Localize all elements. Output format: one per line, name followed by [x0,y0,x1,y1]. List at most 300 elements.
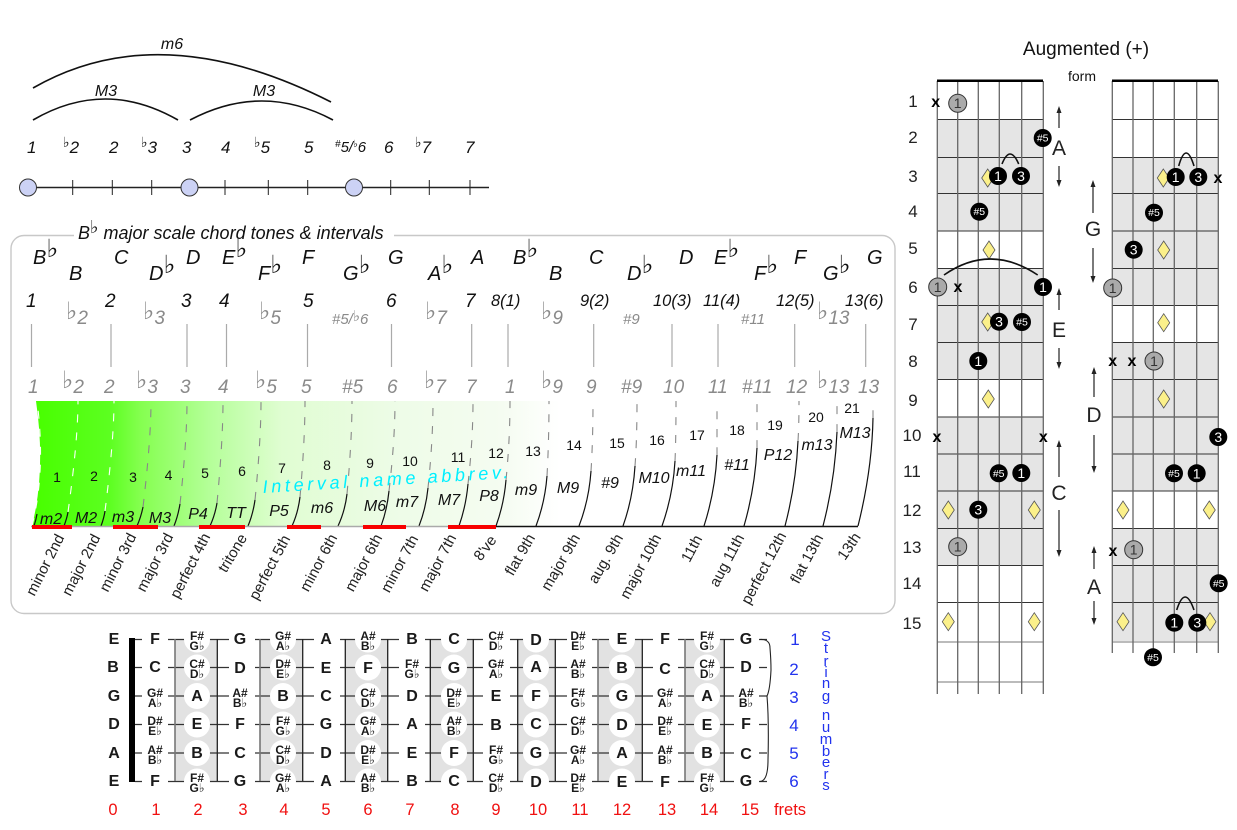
note names row: D [149,263,163,285]
extended interval degrees row: 13 [858,377,880,398]
fretboard note names: C [234,745,246,762]
fretboard note names: A [191,688,203,705]
scale degree labels: ♭ [63,134,70,150]
gray root dots [1104,279,1163,559]
note names row: A [470,247,484,269]
semitone counts: 21 [844,400,860,416]
semitone counts: 9 [366,455,374,471]
rotated interval names: major 6th [342,531,386,595]
black chord tone dots: #5 [1016,316,1028,328]
extended interval degrees row: 6 [387,377,398,398]
guitar fretboard note chart [100,626,832,819]
black chord tone dots [1125,168,1228,666]
scale degree labels: # [335,139,341,150]
fretboard note names: G♭ [488,753,504,767]
fretboard note names: F# [571,686,585,700]
natural scale degrees row: 9(2) [580,292,609,310]
scale degree labels: 1 [27,138,36,157]
altered scale degrees row: 3 [154,308,165,329]
interval abbreviations: M7 [438,492,461,509]
vertical caption: String numbers: t [824,640,829,657]
fret numbers: 15 [741,801,759,819]
extended interval degrees row: 7 [435,377,447,398]
interval number line diagram [20,36,489,196]
fretboard note names: G# [657,686,673,700]
semitone counts: 7 [278,460,286,476]
fretboard note names: A# [232,686,248,700]
altered scale degrees row: #5/ [332,311,353,328]
fretboard note names: A# [360,771,376,785]
extended interval degrees row: 4 [218,377,229,398]
fretboard note names: G [616,688,628,705]
fretboard note names: E [109,631,120,648]
natural scale degrees row: 1 [26,291,37,312]
fretboard note names: D [406,688,418,705]
fretboard note names: E [491,688,502,705]
fretboard note names: F# [700,629,714,643]
fret position numbers [903,92,921,633]
rotated interval names: tritone [215,531,251,576]
altered scale degrees row: ♭ [66,298,77,325]
semitone counts: 13 [525,443,541,459]
note names row: D [679,247,693,269]
form A lower: A [1087,576,1101,599]
natural scale degrees row: 2 [104,291,116,312]
natural scale degrees row: 11(4) [703,292,740,310]
note names row: B [513,247,526,269]
fretboard note names: G♭ [190,781,204,795]
fretboard note names: A [530,659,542,676]
fretboard note names: B♭ [571,667,585,681]
fretboard note names: D♭ [700,667,714,681]
semitone counts: 14 [566,437,582,453]
note names row: ♭ [359,251,370,279]
neck strings [937,81,1043,694]
extended interval degrees row: 3 [180,377,191,398]
semitone counts: 3 [129,469,137,485]
muted string marks: x [1109,543,1118,560]
arc: m6: m6 [161,36,183,53]
note names row: E [714,247,727,269]
fretboard note names: F [741,716,751,733]
rotated interval names [23,529,865,607]
rotated interval names: major 3rd [133,530,177,595]
extended interval degrees row: 5 [266,377,277,398]
fret position numbers: 5 [908,239,918,258]
note names row: C [114,247,129,269]
natural scale degrees row: 8(1) [491,292,520,310]
rotated interval names: 13th [834,530,865,563]
form D [1086,367,1102,473]
note names row: B [549,263,562,285]
altered scale degrees row: #9 [623,311,640,328]
fretboard note names: E [617,774,628,791]
interval abbreviations: M2 [75,510,97,527]
fretboard note names: D♭ [571,724,585,738]
form E: E [1052,319,1066,342]
even fret shading [175,639,724,781]
rotated interval names: 8've [471,532,500,564]
extended interval degrees row: #9 [621,377,643,398]
interval abbreviations: P8 [479,488,499,505]
form A upper: A [1052,137,1066,160]
fretboard note names: A♭ [489,667,503,681]
altered scale degrees row: 13 [828,308,850,329]
fret numbers: 2 [193,801,203,819]
form G: G [1085,218,1101,241]
note names row: ♭ [526,235,538,263]
fretboard note names: G [530,745,542,762]
fretboard note names: B♭ [658,753,672,767]
fret position numbers: 10 [903,426,921,445]
note names row: G [388,247,404,269]
semitone counts: 4 [165,467,173,483]
fret position numbers: 12 [903,501,921,520]
fretboard note names: C# [275,743,291,757]
string numbers: 3 [789,688,799,707]
fretboard note names: C [448,773,460,790]
fretboard note names: D# [446,686,462,700]
fretboard note names: A [701,688,713,705]
fretboard note names: B♭ [739,696,753,710]
fret position numbers: 1 [908,92,918,111]
fretboard note names: D [320,745,332,762]
extended interval degrees row: ♭ [136,367,147,394]
fretboard note names: G [234,631,246,648]
fretboard note names: G [320,716,332,733]
scale degree labels: 3 [182,138,192,157]
form A upper [1052,106,1066,187]
vertical caption: String numbers: e [822,754,830,771]
fretboard note names: E [702,717,713,734]
note backgrounds even frets [184,626,720,794]
panel border [11,236,895,614]
altered scale degrees row: 7 [436,308,448,329]
neck frets [1112,120,1218,602]
fretboard note names: C [320,688,332,705]
position arrows left column [1051,106,1067,557]
rotated interval names: major 7th [416,531,460,595]
fretboard note names: D# [657,714,673,728]
fretboard note names: D [740,659,752,676]
fretboard note names: G# [275,629,291,643]
fret position numbers: 15 [903,614,921,633]
form C: C [1051,482,1067,505]
extended interval degrees row: ♭ [541,367,552,394]
fretboard note names: B♭ [447,724,461,738]
natural scale degrees row: 6 [386,291,397,312]
muted string marks: x [954,279,963,296]
fretboard note names: G [108,688,120,705]
note names row: ♭ [641,251,653,279]
extended interval degrees row: #5 [342,377,364,398]
note names row: ♭ [766,251,778,279]
rotated interval names: flat 13th [787,531,827,586]
heading: Augmented: Augmented (+) [1023,39,1149,60]
fretboard note names: F [660,774,670,791]
fretboard note names: A♭ [276,781,290,795]
fretboard note names: A♭ [361,724,375,738]
altered scale degrees row: ♭ [541,298,552,325]
neck nut [1112,80,1218,82]
vertical caption: String numbers: u [822,719,830,736]
fretboard note names: A [108,745,120,762]
vertical caption: String numbers: n [822,675,830,692]
note names row: ♭ [270,251,282,279]
fret numbers: 11 [571,801,589,819]
fretboard note names: B♭ [361,639,375,653]
fretboard note names: E♭ [571,781,585,795]
natural scale degrees row: 12(5) [776,292,815,310]
fretboard note names: F# [190,629,204,643]
fret numbers: 0 [108,801,118,819]
black chord tone dots: #5 [1147,652,1159,664]
note names row: D [186,247,200,269]
yellow diamonds [942,169,1040,631]
fretboard note names: G♭ [276,724,290,738]
fret numbers: 4 [279,801,289,819]
fret position numbers: 6 [908,278,918,297]
muted string marks: x [933,429,942,446]
extended interval degrees row: 11 [708,377,728,398]
fretboard note names: B♭ [361,781,375,795]
fret numbers: 6 [363,801,373,819]
fretboard note names: G [234,773,246,790]
neck nut [937,80,1043,82]
fretboard note names: D♭ [276,753,290,767]
fretboard note names: G [448,660,460,677]
semitone counts: 6 [238,463,246,479]
semitone counts: 2 [90,468,98,484]
fretboard note names: E♭ [571,639,585,653]
fretboard note names: A♭ [276,639,290,653]
altered scale degrees row: 5 [270,308,281,329]
note names row [33,235,883,285]
scale degree labels: 6 [358,139,367,156]
fretboard note names: G# [360,714,376,728]
gray root dots: 1 [1150,353,1158,369]
panel heading: B [78,223,90,243]
fretboard note names: F [531,688,541,705]
scale degree labels: 6 [384,138,394,157]
vertical caption: String numbers: n [822,707,830,724]
lower light fret [1112,641,1218,643]
note names row: G [867,247,883,269]
interval abbreviations: m11 [676,463,706,480]
fretboard note names: F [150,773,160,790]
semitone counts [53,400,860,485]
black chord tone dots: 3 [1193,615,1201,631]
black chord tone dots: 1 [1039,279,1047,295]
gray root dots: 1 [954,538,962,554]
arc: M3 left: M3 [95,83,117,100]
fret numbers: 14 [700,801,718,819]
semitone counts: 15 [609,435,625,451]
white dashed fan lines [32,401,114,526]
chord tone circles [20,179,362,196]
extended interval degrees row: 12 [786,377,808,398]
natural scale degrees row: 5 [303,291,314,312]
scale degree labels: 5 [261,138,271,157]
fretboard note names: B [107,659,119,676]
fret numbers: 3 [238,801,248,819]
extended interval degrees row [28,367,880,398]
interval abbreviations: M13 [839,425,871,442]
fretboard note names: A# [360,629,376,643]
rotated interval names: minor 6th [297,531,341,595]
black chord tone dots: 1 [994,168,1002,184]
extended interval degrees row: ♭ [817,367,828,394]
extended interval degrees row: ♭ [255,367,266,394]
interval abbreviations [40,425,871,528]
vertical caption: String numbers: b [822,743,830,760]
string numbers: 1 [790,630,800,649]
extended interval degrees row: 9 [586,377,597,398]
vertical caption: String numbers: i [824,664,828,681]
note names row: D [627,263,641,285]
rotated interval names: perfect 12th [738,529,790,607]
fret position numbers: 9 [908,391,918,410]
fretboard note names: A# [147,743,163,757]
neck strings [1112,81,1218,653]
extended interval degrees row: 10 [663,377,685,398]
scale degree labels: 7 [422,138,432,157]
note names row: B [69,263,82,285]
semitone counts: 10 [402,453,418,469]
slur arcs [944,154,1038,275]
string numbers: 2 [789,660,799,679]
rotated interval names: 11th [678,532,706,565]
fretboard note names: C [659,661,671,678]
interval abbreviations: TT [226,505,247,522]
form A lower [1087,546,1101,625]
fretboard note names: C [149,659,161,676]
note names row: ♭ [727,235,739,263]
altered scale degrees row: ♭ [425,298,436,325]
rotated interval names: flat 9th [502,531,539,579]
note names row: ♭ [839,251,850,279]
fretboard note names: D [530,774,542,791]
fretboard note names: E♭ [447,696,461,710]
fret position numbers: 8 [908,352,918,371]
fretboard note names: B [701,745,713,762]
interval abbreviations: P4 [188,506,208,523]
fret position numbers: 4 [908,202,918,221]
right neck diagram [1104,80,1228,666]
fretboard note names: G# [147,686,163,700]
position arrows right column [1085,180,1102,625]
fretboard note names: A# [570,657,586,671]
fretboard note names: A [320,631,332,648]
fretboard note names: G♭ [570,696,586,710]
black chord tone dots: #5 [993,468,1005,480]
semitone counts: 8 [323,457,331,473]
note names row: F [754,263,766,285]
fretboard note names: A# [657,743,673,757]
fretboard note names: D# [570,771,586,785]
fretboard note names: D [530,632,542,649]
muted string marks [1108,170,1223,560]
form E [1052,288,1066,369]
note names row: F [258,263,270,285]
black chord tone dots: 1 [1017,465,1025,481]
muted string marks: x [1128,353,1137,370]
black chord tone dots: 3 [1130,242,1138,258]
fret numbers: 1 [151,801,161,819]
interval abbreviations: m13 [801,437,833,454]
fretboard note names: E [321,660,332,677]
altered scale degrees row: 6 [360,311,369,328]
vertical caption: String numbers: m [820,731,832,748]
altered scale degrees row: ♭ [143,298,154,325]
altered scale degrees row: ♭ [259,298,270,325]
note names row: G [823,263,839,285]
interval abbreviations: P12 [764,447,792,464]
rotated interval names: minor 7th [378,532,422,596]
extended interval degrees row: 1 [28,377,39,398]
fretboard note names: D# [275,657,291,671]
fretboard note names: C# [360,686,376,700]
fretboard note names: A# [738,686,754,700]
black chord tone dots [969,129,1052,519]
scale degree labels: ♭ [254,134,261,150]
extended interval degrees row: #11 [742,377,772,398]
black chord tone dots: 1 [1170,615,1178,631]
rotated interval names: aug. 9th [585,531,627,587]
fretboard note names: A [320,773,332,790]
fretboard note names: C# [488,629,504,643]
fretboard note names: C# [699,657,715,671]
note names row: ♭ [46,235,58,263]
fretboard note names: B [277,688,289,705]
lower light frets [937,642,1043,682]
shaded fret zones [1112,157,1218,642]
fretboard note names: E [192,716,203,733]
semitone counts: 20 [808,409,824,425]
fretboard note names: B♭ [148,753,162,767]
fret position numbers: 14 [903,574,921,593]
note backgrounds odd frets [100,630,759,790]
fretboard note names: C [740,746,752,763]
natural scale degrees row: 4 [219,291,230,312]
interval abbreviations: M3 [149,510,171,527]
fretboard note names: D♭ [361,696,375,710]
fretboard note names: A [406,716,418,733]
black chord tone dots: #5 [1037,132,1049,144]
fretboard note names: E♭ [658,724,672,738]
fretboard note names: E [109,773,120,790]
scale degree labels: ♭ [141,134,148,150]
fretboard note names: C# [570,714,586,728]
gray root dots: 1 [1130,542,1138,558]
vertical caption: String numbers: r [824,766,828,783]
note names row: G [343,263,359,285]
fretboard note names: G [740,631,752,648]
fret numbers: frets [774,801,806,819]
fretboard note names: D♭ [489,781,503,795]
gray root dots: 1 [954,95,962,111]
fretboard note names: E [617,631,628,648]
natural scale degrees row: 13(6) [845,292,884,310]
semitone counts: 17 [689,427,705,443]
brace [760,639,771,782]
fretboard note names: D# [360,743,376,757]
altered scale degrees row: 2 [76,308,88,329]
interval abbreviations: M6 [364,498,386,515]
natural scale degrees row [26,291,884,312]
interval abbreviations: m9 [515,482,537,499]
note names row: C [589,247,604,269]
